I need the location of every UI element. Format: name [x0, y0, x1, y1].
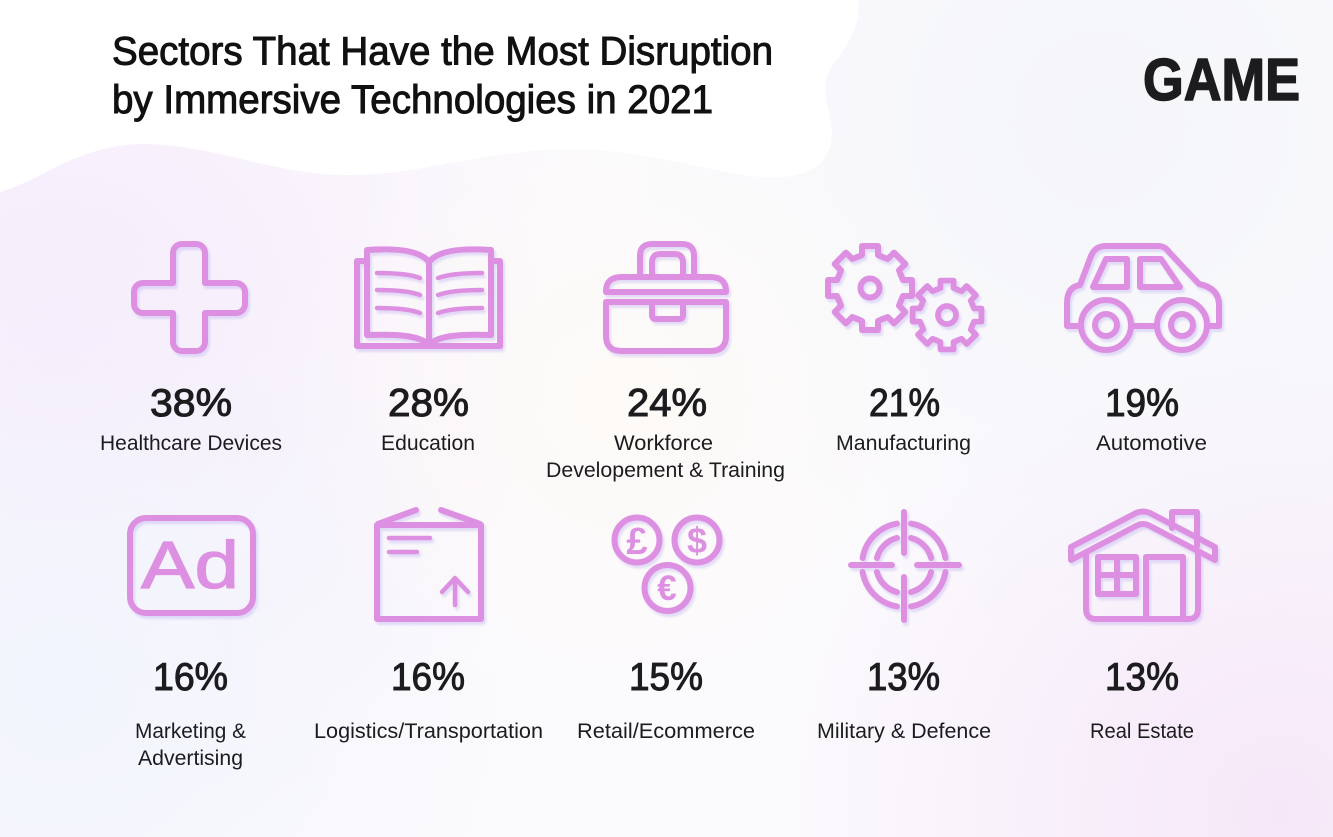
panel: logistics [314, 510, 543, 743]
label: Developement & Training [546, 459, 785, 482]
panel: marketing and advertising [130, 518, 253, 770]
value: 16% [153, 656, 228, 699]
label: Real Estate [1090, 720, 1194, 743]
panel: education [357, 249, 500, 455]
logo: GAME: GAME [1143, 47, 1300, 113]
label: Advertising [138, 747, 243, 770]
panel: military [817, 512, 991, 743]
label: Logistics/Transportation [314, 720, 543, 743]
icon: medical cross [134, 244, 245, 351]
icon: parcel box [377, 510, 481, 619]
icon: house [1071, 512, 1215, 619]
label: Manufacturing [836, 432, 971, 455]
icon: open book [357, 249, 500, 346]
value: 13% [867, 656, 940, 699]
title: Sectors That Have the Most Disruption [112, 30, 773, 74]
icon: gears [828, 246, 981, 349]
icon: coins [614, 518, 720, 611]
panel: manufacturing [828, 246, 981, 455]
value: 19% [1105, 382, 1179, 425]
panel: real estate [1071, 512, 1215, 743]
label: Education [381, 432, 475, 455]
icon: ad: Ad [141, 528, 239, 603]
value: 13% [1105, 656, 1179, 699]
value: 16% [391, 656, 465, 699]
icon: ad [130, 518, 253, 613]
icon: toolbox [606, 244, 726, 351]
icon: coins: € [657, 569, 677, 608]
icon: coins: $ [687, 520, 707, 561]
title: by Immersive Technologies in 2021 [112, 78, 713, 122]
white header blob [0, 0, 859, 192]
value: 38% [150, 382, 232, 425]
label: Marketing & [135, 720, 246, 743]
panel: automotive [1067, 246, 1219, 455]
label [546, 432, 785, 482]
panel: retail [577, 518, 755, 743]
value: 24% [627, 382, 707, 425]
panel: healthcare devices [100, 244, 282, 455]
label: Healthcare Devices [100, 432, 282, 455]
value: 15% [629, 656, 703, 699]
label: Automotive [1096, 432, 1207, 455]
value: 28% [388, 382, 469, 425]
label: Military & Defence [817, 720, 991, 743]
icon: coins: £ [626, 521, 648, 563]
label: Retail/Ecommerce [577, 720, 755, 743]
value: 21% [869, 382, 940, 425]
title [112, 30, 773, 122]
label: Workforce [614, 432, 713, 455]
icon: target [851, 512, 959, 620]
label [135, 720, 246, 770]
panel: workforce development [546, 244, 785, 482]
icon: car [1067, 246, 1219, 350]
